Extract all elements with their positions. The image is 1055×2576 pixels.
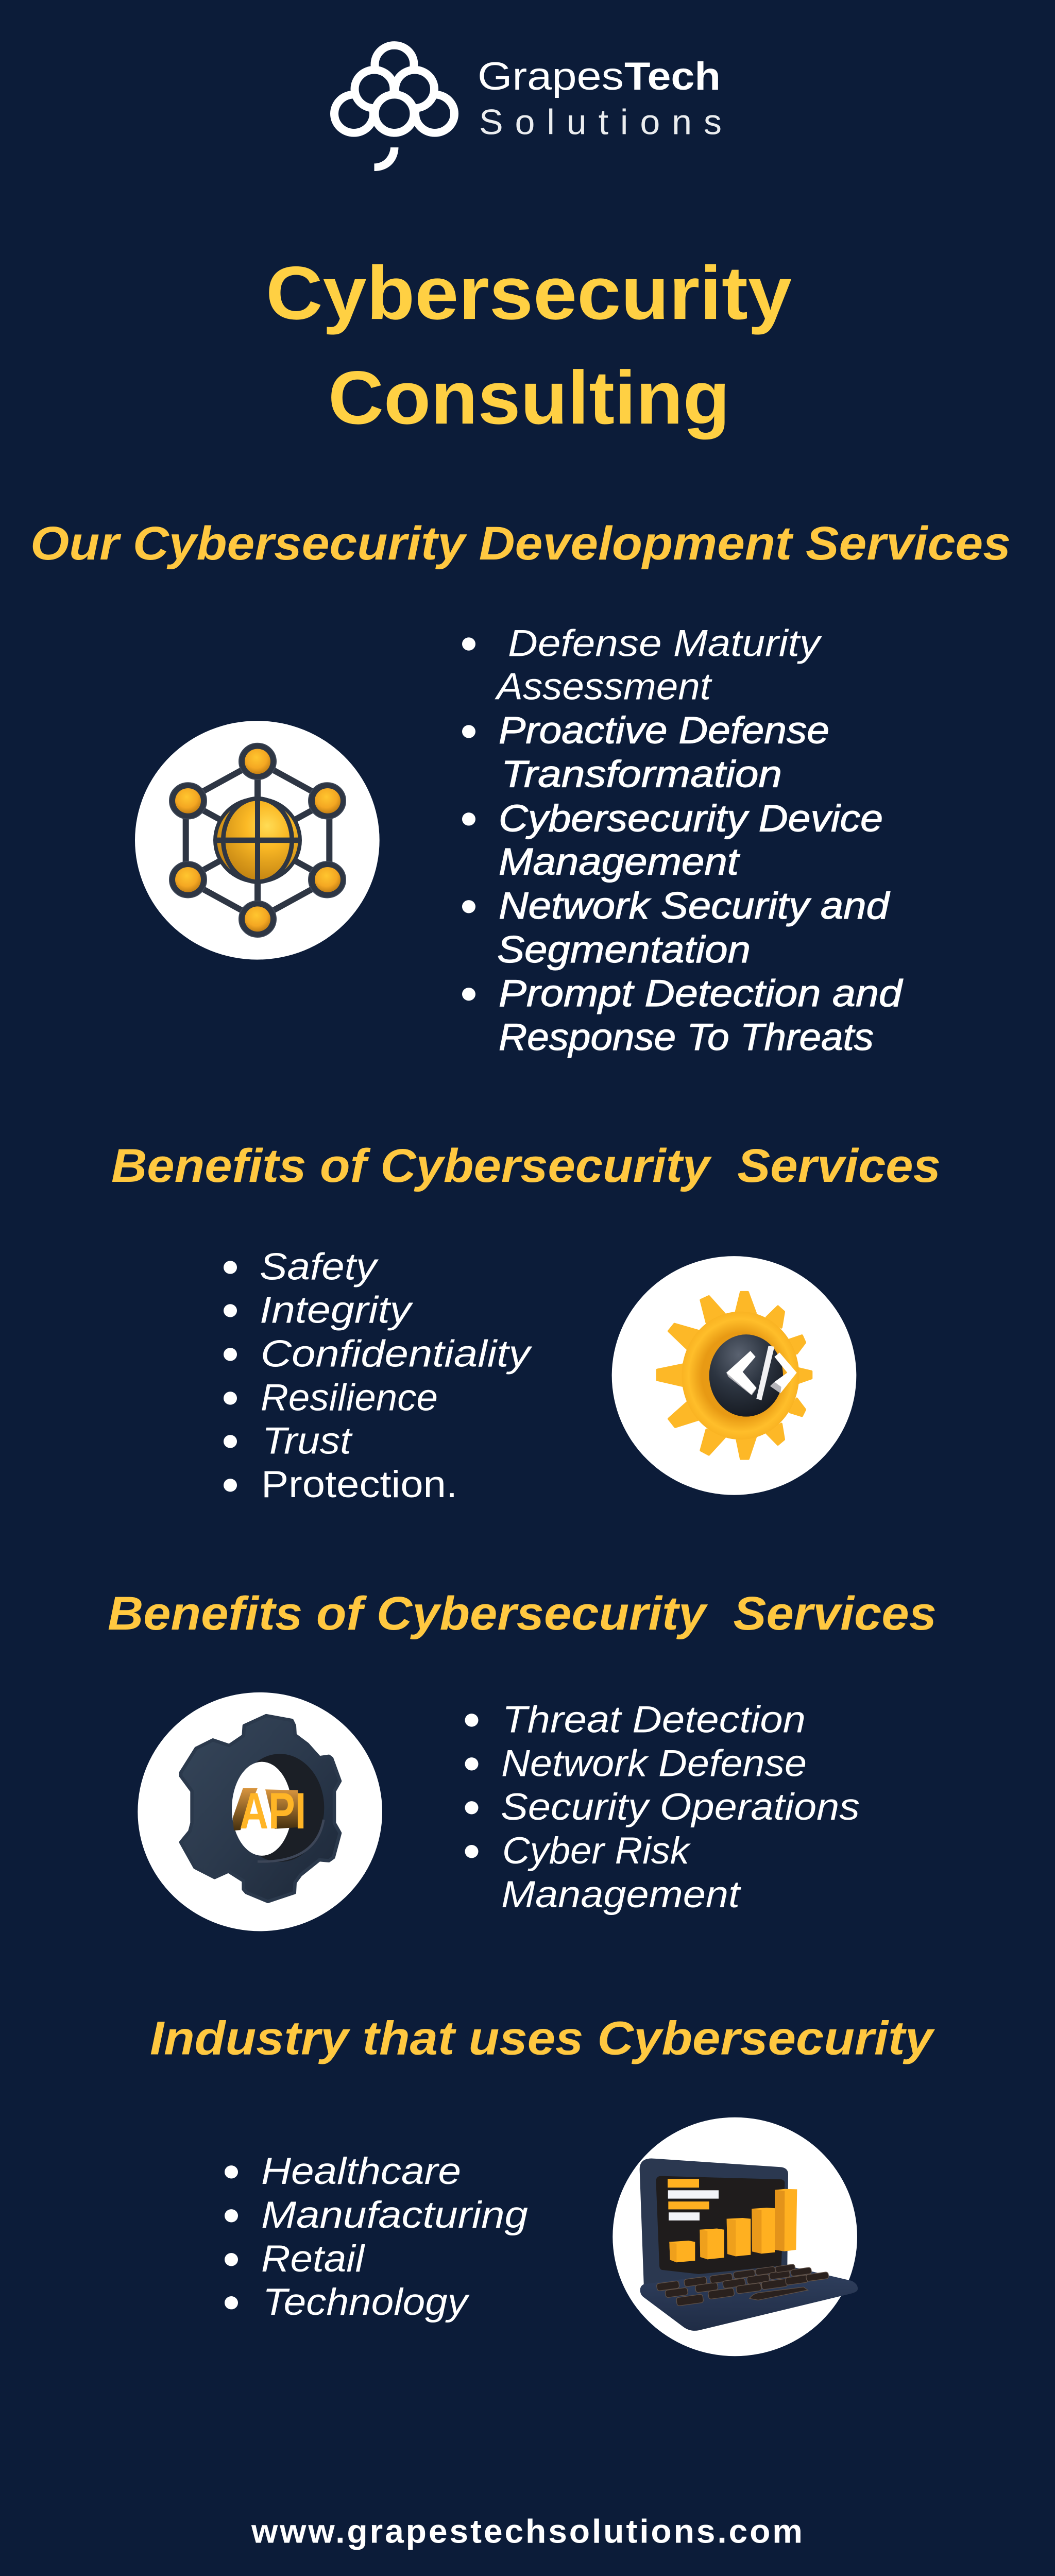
list: industries: Retail (261, 2238, 366, 2280)
list: benefits: Safety (260, 1245, 379, 1287)
title: Cybersecurity (266, 251, 792, 335)
list item: Prompt Detection and Response To Threats: Prompt Detection and (499, 972, 904, 1014)
list item: Defense Maturity Assessment: Assessment (495, 665, 713, 707)
icon: laptop with bar chart in white circle (612, 2117, 858, 2356)
keyboard keys (656, 2264, 829, 2306)
heading: Benefits of Cybersecurity Services: Benefits of Cybersecurity Services (111, 1139, 941, 1192)
heading: Industry that uses Cybersecurity: Industry that uses Cybersecurity (150, 2011, 935, 2064)
heading: Our Cybersecurity Development Services: Our Cybersecurity Development Services (30, 517, 1011, 570)
label: API: API (240, 1783, 306, 1840)
logo wordmark: Tech: Tech (624, 55, 721, 98)
legend bars (668, 2179, 719, 2221)
list: benefits: Confidentiality (261, 1332, 532, 1375)
list: capabilities: Threat Detection (502, 1698, 806, 1740)
icon: dark API gear in white circle (138, 1692, 382, 1931)
logo wordmark: Solutions: Solutions (479, 102, 722, 142)
list item: Proactive Defense Transformation: Transformation (501, 753, 782, 795)
icon: grape cluster (334, 45, 454, 171)
list item: Defense Maturity Assessment: Defense Maturity (508, 622, 822, 664)
heading: Benefits of Cybersecurity Services (second): Benefits of Cybersecurity Services (108, 1587, 937, 1640)
list: capabilities: Cyber Risk (502, 1829, 691, 1872)
list: benefits: Resilience (261, 1376, 438, 1418)
list: industries: Technology (263, 2281, 470, 2323)
list: benefits: Integrity (260, 1289, 413, 1331)
list: services (462, 622, 904, 1058)
list item: Defense Maturity Assessment (462, 622, 822, 707)
list: capabilities: Management (501, 1873, 742, 1916)
logo: GrapesTech Solutions (334, 45, 722, 171)
icon: orange code gear in white circle (612, 1256, 856, 1495)
list item: Prompt Detection and Response To Threats: Response To Threats (499, 1016, 874, 1058)
bar chart (669, 2189, 797, 2262)
list: benefits: Protection. (261, 1463, 457, 1505)
list item: Proactive Defense Transformation (462, 709, 829, 795)
logo wordmark: Grapes: Grapes (478, 55, 624, 98)
list: capabilities: Security Operations (501, 1786, 860, 1828)
list item: Network Security and Segmentation: Network Security and (499, 885, 891, 927)
list item: Cybersecurity Device Management (462, 797, 883, 883)
list item: Network Security and Segmentation (462, 885, 891, 971)
list: benefits (224, 1245, 532, 1505)
footer: website: www.grapestechsolutions.com (251, 2513, 803, 2550)
list item: Cybersecurity Device Management: Cybersecurity Device (499, 797, 883, 839)
list: capabilities: Network Defense (501, 1742, 807, 1784)
list item: Prompt Detection and Response To Threats (462, 972, 904, 1058)
list: capabilities (465, 1698, 860, 1916)
list: industries: Healthcare (261, 2150, 461, 2192)
icon: network globe in white circle (135, 721, 380, 960)
title (266, 251, 792, 440)
list item: Network Security and Segmentation: Segmentation (497, 928, 751, 971)
list: industries (225, 2150, 528, 2323)
list: benefits: Trust (262, 1419, 353, 1462)
list item: Proactive Defense Transformation: Proactive Defense (499, 709, 829, 751)
list item: Cybersecurity Device Management: Management (499, 840, 741, 883)
title: Consulting (328, 356, 730, 440)
list: industries: Manufacturing (261, 2194, 528, 2236)
